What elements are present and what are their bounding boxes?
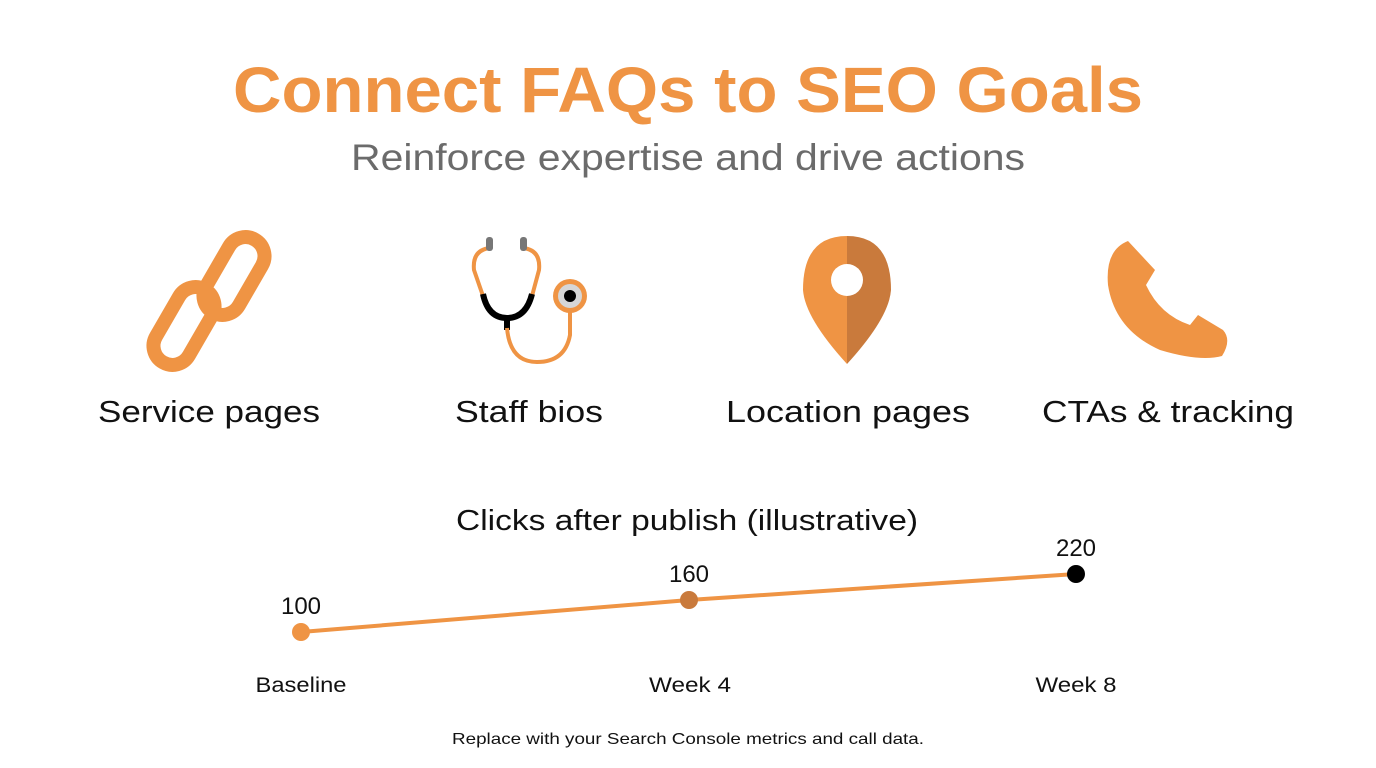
subtitle: Reinforce expertise and drive actions: [351, 137, 1025, 178]
labels: CTAs & tracking: [1042, 394, 1294, 429]
labels: Staff bios: [455, 394, 603, 429]
line chart: 100: [281, 593, 321, 620]
labels: Service pages: [98, 394, 320, 429]
labels: Location pages: [726, 394, 970, 429]
icon: location pin: [803, 236, 891, 364]
line chart: 220: [1056, 535, 1096, 562]
line chart: [256, 535, 1116, 697]
chart title: Clicks after publish (illustrative): [456, 505, 918, 537]
title: Connect FAQs to SEO Goals: [233, 54, 1143, 126]
icon: stethoscope: [474, 237, 587, 362]
labels: [98, 394, 1294, 429]
line chart: Week 8: [1036, 674, 1116, 697]
icon: link: [147, 230, 271, 372]
footnote: Replace with your Search Console metrics and call data.: [452, 731, 924, 748]
line chart: Baseline: [256, 674, 346, 697]
icon: phone: [1108, 241, 1227, 358]
line chart: 160: [669, 561, 709, 588]
line chart: Week 4: [649, 674, 731, 697]
